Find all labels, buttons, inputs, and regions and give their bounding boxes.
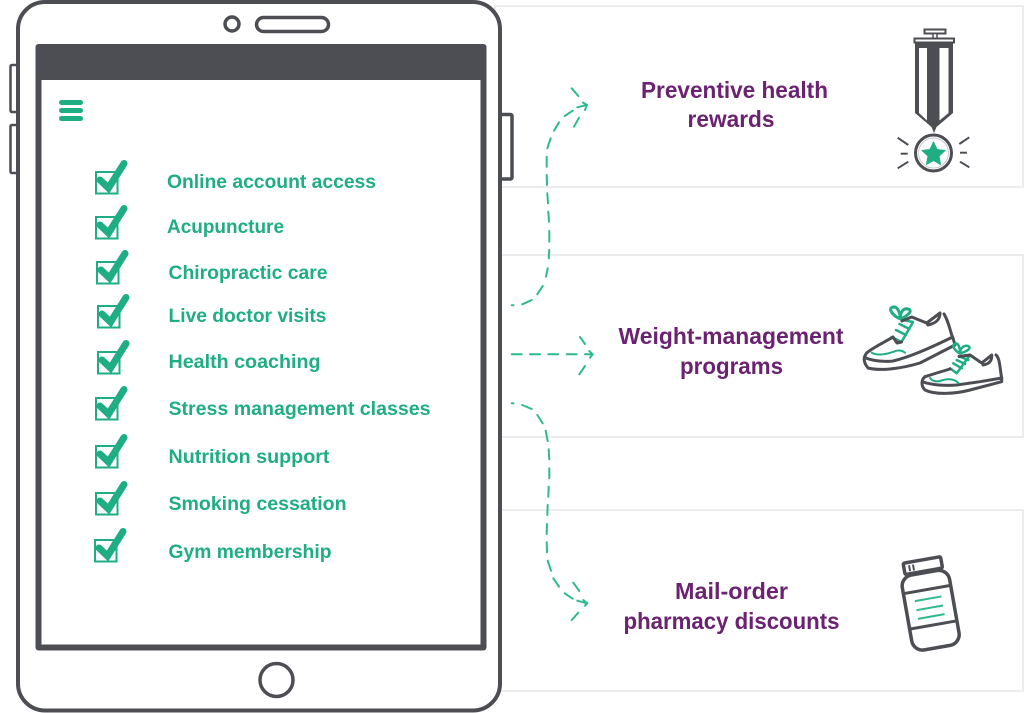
item: live doctor visits: Live doctor visits	[168, 305, 327, 327]
screen frame	[38, 47, 484, 648]
item: stress management classes: Stress management classes	[168, 398, 431, 420]
item: health coaching	[98, 344, 320, 374]
right shoe	[922, 344, 1002, 393]
tablet body	[18, 2, 500, 710]
item: live doctor visits	[98, 298, 327, 328]
arrow: to mail-order pharmacy discounts	[512, 403, 587, 620]
item: acupuncture	[96, 208, 284, 238]
heading line: programs: programs	[680, 353, 783, 379]
item: chiropractic care: Chiropractic care	[168, 262, 328, 284]
icon: sneakers	[864, 307, 1002, 393]
left shoe	[864, 307, 955, 369]
item: gym membership	[95, 532, 332, 563]
item: online account access	[96, 164, 376, 194]
icon: hamburger menu	[59, 100, 83, 121]
icon: side button right	[499, 114, 512, 179]
speaker	[256, 18, 328, 32]
item: chiropractic care	[97, 254, 328, 284]
heading: preventive health rewards: Preventive health	[641, 77, 828, 103]
icon: side button left top	[10, 65, 18, 112]
icon: pill bottle	[898, 556, 961, 652]
heading: mail-order: Mail-order	[675, 578, 788, 604]
heading line: rewards: rewards	[688, 106, 774, 132]
item: stress management classes	[96, 390, 431, 420]
item: smoking cessation: Smoking cessation	[168, 493, 346, 515]
panel: mail-order pharmacy discounts	[495, 510, 1023, 691]
camera	[225, 17, 239, 31]
icon: side button left bottom	[10, 125, 18, 173]
checklist	[95, 164, 431, 563]
panel: preventive health rewards	[495, 6, 1023, 187]
item: nutrition support	[96, 438, 330, 468]
screen header bar	[36, 45, 486, 80]
arrow: to preventive health rewards	[512, 88, 587, 305]
item: smoking cessation	[96, 484, 346, 515]
item: online account access: Online account access	[167, 171, 376, 193]
home button	[260, 664, 293, 696]
item: health coaching: Health coaching	[168, 351, 320, 373]
panel: weight-management programs	[495, 255, 1023, 437]
item: acupuncture: Acupuncture	[167, 216, 284, 238]
item: gym membership: Gym membership	[168, 541, 332, 563]
heading line: pharmacy discounts: pharmacy discounts	[624, 608, 840, 634]
tablet device	[18, 2, 500, 710]
item: nutrition support: Nutrition support	[168, 446, 330, 468]
arrow: to weight-management programs	[512, 337, 593, 374]
heading: weight-management: Weight-management	[618, 323, 844, 349]
icon: medal	[898, 30, 969, 171]
